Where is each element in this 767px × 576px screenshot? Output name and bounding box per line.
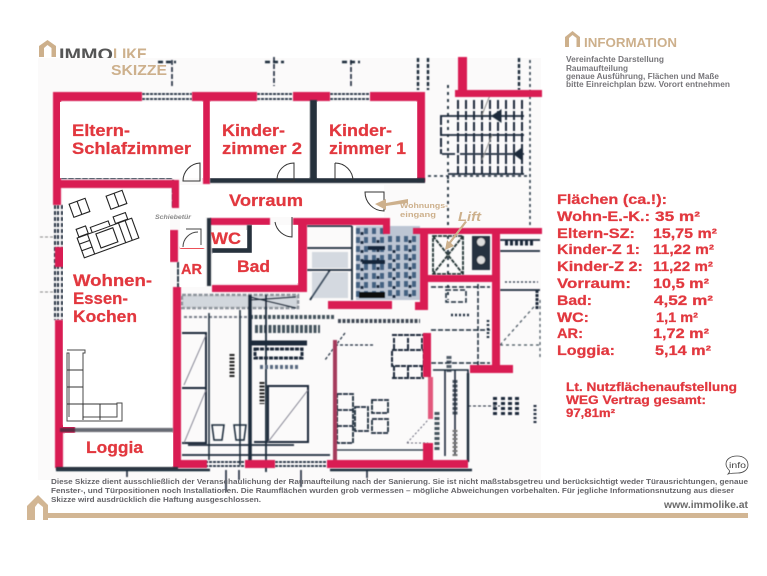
lift	[433, 236, 463, 274]
room label: Vorraum: Vorraum	[229, 192, 303, 210]
area table: 4,52 m²	[654, 293, 714, 308]
total area note	[566, 382, 737, 420]
room label: Eltern-Schlafzimmer: Schlafzimmer	[72, 140, 192, 158]
area table: Bad:	[557, 293, 592, 308]
room: Kinderzimmer 2	[210, 102, 309, 178]
area table: Eltern-SZ:	[557, 226, 635, 241]
area table: Vorraum:	[557, 276, 631, 291]
room label: Kinderzimmer 1: Kinder-	[329, 122, 392, 140]
icon: kitchen block	[69, 190, 139, 258]
room label: Loggia: Loggia	[86, 439, 144, 457]
window frames top	[142, 94, 370, 99]
room label: Kinderzimmer 2	[222, 122, 302, 158]
logo: Immolike	[39, 40, 147, 64]
room label: Wohnen-Essen-Kochen: Essen-	[73, 290, 128, 308]
lift arrow	[445, 221, 467, 250]
room label: WC: WC	[211, 230, 241, 248]
icon: sofa	[67, 350, 122, 421]
room label: Wohnen-Essen-Kochen	[73, 272, 152, 326]
total area note: 97,81m²	[566, 408, 615, 420]
area table: WC:	[557, 310, 589, 325]
room: Eltern-Schlafzimmer	[60, 102, 203, 178]
footer url: www.immolike.at	[663, 500, 749, 511]
label: Schiebetür: Schiebetür	[155, 215, 192, 221]
disclaimer text	[51, 477, 748, 504]
column dots	[447, 85, 449, 300]
area table: AR:	[557, 326, 583, 341]
room: WC	[212, 230, 247, 248]
room label: Kinderzimmer 1: zimmer 1	[329, 140, 406, 158]
area table: Kinder-Z 2:	[557, 259, 643, 274]
left window	[55, 205, 62, 320]
area table: 11,22 m²	[653, 242, 715, 257]
room label: Wohnen-Essen-Kochen: Kochen	[73, 308, 137, 326]
linework of the scanned plan	[40, 57, 540, 492]
disclaimer text: Diese Skizze dient ausschließlich der Veranschaulichung der Raumaufteilung nach der Sanierung. Sie ist nicht maßstabsgetreu und berücksichtigt weder Türausrichtungen, genaue	[51, 477, 748, 486]
kitchen next door	[431, 284, 490, 370]
area table	[557, 192, 718, 358]
icon: info bubble: info	[729, 460, 746, 470]
heading: Information	[565, 31, 677, 50]
room: Vorraum	[180, 185, 384, 248]
area table: 1,1 m²	[656, 310, 699, 325]
label: Wohnungseingang: Wohnungs-	[400, 201, 449, 210]
icon: info bubble	[726, 456, 748, 474]
red walls	[53, 57, 542, 468]
label: Wohnungseingang	[400, 201, 449, 219]
area table: 11,22 m²	[653, 259, 714, 274]
room: AR	[180, 249, 205, 287]
information text: genaue Ausführung, Flächen und Maße	[566, 72, 720, 81]
heading: Information: INFORMATION	[584, 36, 677, 50]
door swings	[183, 163, 384, 247]
area table: Kinder-Z 1:	[557, 242, 640, 257]
Kinderzimmer lower left	[182, 295, 298, 308]
area table: Wohn-E.-K.:	[557, 209, 650, 224]
room: Wohnen-Essen-Kochen	[63, 189, 170, 427]
room label: AR: AR	[181, 262, 203, 278]
room: Kinderzimmer 1	[317, 102, 417, 178]
room label: Kinderzimmer 1	[329, 122, 406, 158]
label: Wohnungseingang: eingang	[400, 210, 437, 219]
information text	[566, 55, 730, 89]
total area note: Lt. Nutzflächenaufstellung	[566, 382, 737, 394]
disclaimer text: Skizze wird ausdrücklich die Haftung ausgeschlossen.	[51, 495, 261, 504]
area table: 5,14 m²	[655, 343, 712, 358]
bottom dimension ticks	[127, 470, 367, 492]
plan paper	[38, 58, 541, 480]
dark interior walls	[56, 100, 425, 470]
area table: 10,5 m²	[653, 276, 710, 291]
room label: Eltern-Schlafzimmer: Eltern-	[72, 122, 130, 140]
total area note: WEG Vertrag gesamt:	[566, 395, 706, 407]
stairs	[440, 95, 524, 174]
room label: Bad: Bad	[237, 258, 270, 276]
room label: Eltern-Schlafzimmer	[72, 122, 192, 158]
label: Lift: Lift	[458, 209, 482, 224]
entrance arrow	[375, 199, 408, 210]
room label: Wohnen-Essen-Kochen: Wohnen-	[73, 272, 152, 290]
bathroom and neighbouring flat	[307, 226, 352, 300]
area table: 35 m²	[655, 209, 701, 224]
Loggia right	[433, 370, 468, 460]
logo: Immolike: LIKE	[113, 45, 147, 64]
room: Loggia	[65, 433, 173, 466]
area table: 1,72 m²	[653, 326, 710, 341]
area table: 15,75 m²	[653, 226, 718, 241]
area table: Flächen (ca.!):	[557, 192, 667, 207]
room label: Kinderzimmer 2: Kinder-	[222, 122, 285, 140]
area table: Loggia:	[557, 343, 615, 358]
information text: Vereinfachte Darstellung	[566, 55, 664, 64]
room: Bad	[213, 225, 298, 283]
information text: Raumaufteilung	[566, 64, 628, 73]
heading: Skizze: SKIZZE	[111, 62, 167, 79]
disclaimer text: Fenster-, und Türpositionen noch Installationen. Die Raumflächen wurden grob vermessen – mögliche Abweichungen vorbehalten. Für jegliche Informationsnutzung aus dieser	[51, 486, 734, 495]
footer logo and rule	[27, 495, 748, 520]
Wohnzimmer	[338, 319, 420, 323]
floor plan	[38, 57, 542, 492]
room label: Kinderzimmer 2: zimmer 2	[222, 140, 302, 158]
top dimension ticks	[172, 57, 351, 88]
logo: Immolike: IMMO	[59, 45, 113, 64]
information text: bitte Einreichplan bzw. Vorort entnehmen	[566, 80, 730, 89]
